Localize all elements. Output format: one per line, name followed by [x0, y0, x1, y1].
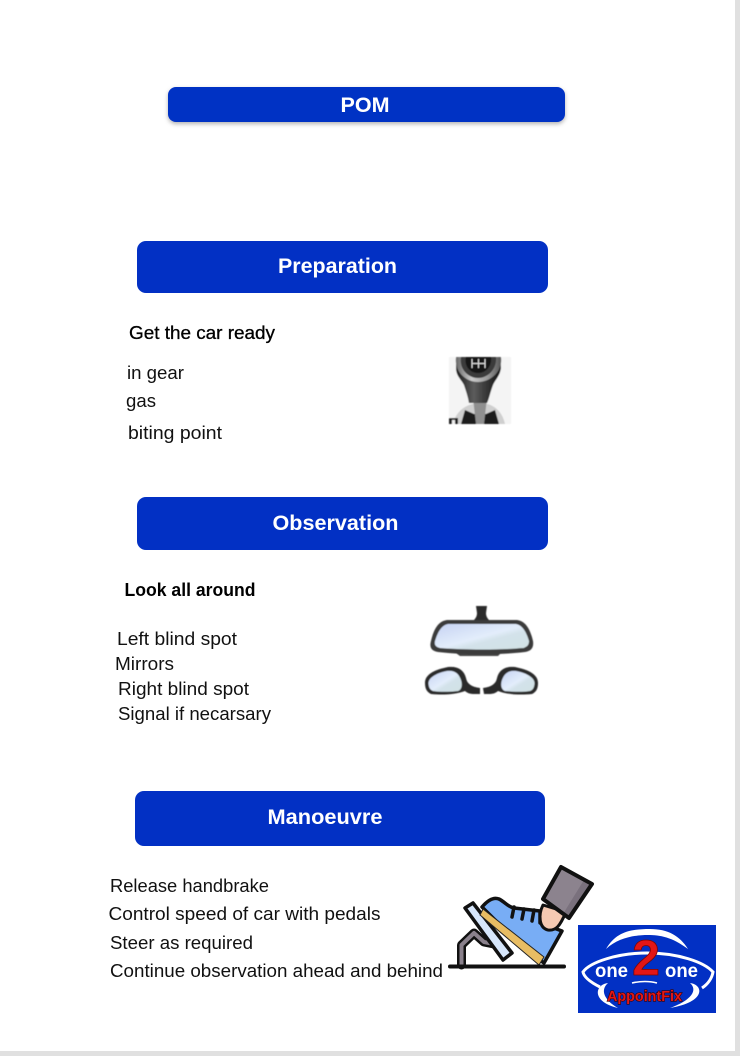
text block: observation list: Mirrors: [115, 654, 174, 674]
text block: preparation list: in gear: [127, 363, 184, 383]
icon: foot on pedal: [450, 867, 592, 966]
text block: manoeuvre list: Steer as required: [110, 933, 253, 953]
text block: manoeuvre list: Continue observation ahead and behind: [110, 961, 443, 981]
logo: one 2 one AppointFix: [578, 925, 716, 1013]
logo: one 2 one AppointFix: 2: [632, 930, 660, 986]
heading: Observation: Observation: [272, 512, 398, 535]
text block: manoeuvre list: [108, 876, 443, 981]
heading: Preparation: Preparation: [278, 255, 397, 278]
text block: preparation list: biting point: [128, 423, 222, 443]
text block: preparation list: gas: [126, 391, 156, 411]
heading: Manoeuvre: Manoeuvre: [268, 806, 382, 829]
icon: gear stick: [449, 357, 511, 424]
heading: Preparation: [137, 241, 548, 293]
text block: observation subheading: Look all around: [124, 580, 256, 600]
icon: car mirrors: [425, 606, 538, 695]
title: POM: [168, 87, 565, 122]
logo: one 2 one AppointFix: one: [665, 961, 698, 982]
text block: manoeuvre list: Control speed of car with pedals: [108, 904, 380, 924]
text block: observation list: [115, 629, 271, 724]
text block: preparation subheading: Get the car ready: [129, 323, 275, 343]
text block: observation list: Left blind spot: [117, 629, 237, 649]
logo: one 2 one AppointFix: AppointFix: [607, 989, 682, 1005]
heading: Observation: [137, 497, 548, 550]
text block: manoeuvre list: Release handbrake: [110, 876, 269, 896]
text block: observation list: Right blind spot: [118, 679, 249, 699]
title: POM: POM: [340, 94, 390, 117]
heading: Manoeuvre: [135, 791, 545, 846]
text block: preparation list: [126, 363, 222, 443]
text block: observation list: Signal if necarsary: [118, 704, 271, 724]
logo: one 2 one AppointFix: one: [595, 961, 628, 982]
